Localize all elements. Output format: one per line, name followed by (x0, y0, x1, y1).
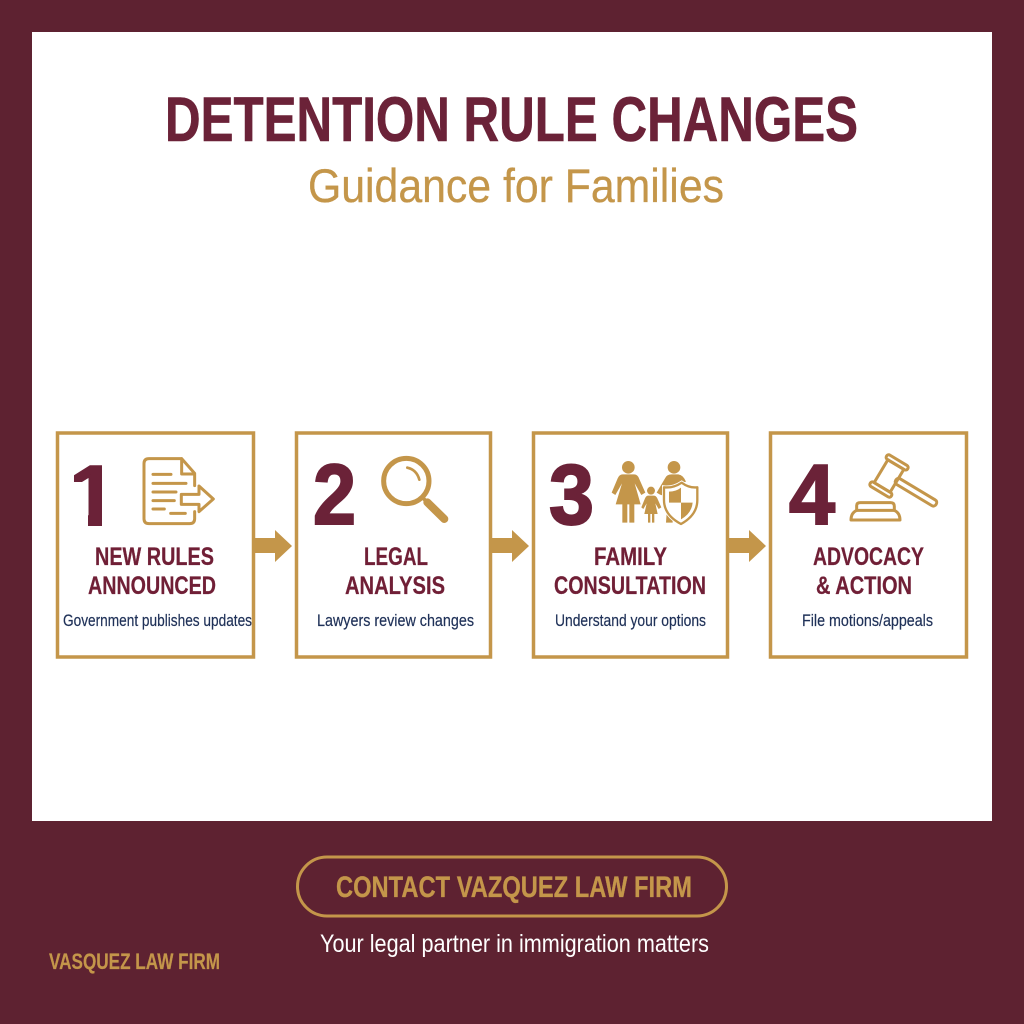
step 1 heading (88, 543, 216, 600)
call-to-action button (298, 857, 726, 916)
icon: document with arrow (144, 459, 213, 524)
step 2 heading: ANALYSIS (345, 572, 445, 600)
panel: white content area (32, 32, 992, 821)
panel: step 2 (296, 433, 490, 657)
icon: gavel (851, 454, 946, 520)
step 4 number: 4 (789, 448, 835, 543)
step 1 description: Government publishes updates (63, 611, 252, 630)
step 1 heading: NEW RULES (95, 543, 214, 571)
step 2 heading (345, 543, 445, 600)
step 3 number: 3 (549, 448, 594, 543)
subtitle: Guidance for Families (308, 159, 724, 212)
title: DETENTION RULE CHANGES (165, 85, 858, 155)
step 4 heading: & ACTION (816, 572, 912, 600)
icon: family with shield (612, 461, 697, 524)
step 2 description: Lawyers review changes (317, 611, 474, 630)
step 3 heading: FAMILY (594, 543, 667, 571)
call-to-action button: CONTACT VAZQUEZ LAW FIRM (336, 871, 692, 904)
panel: step 4 (770, 433, 966, 657)
step 4 description: File motions/appeals (802, 611, 933, 630)
arrow: step 3 to 4 (729, 530, 766, 562)
step 2 heading: LEGAL (364, 543, 428, 571)
step 3 heading: CONSULTATION (554, 572, 706, 600)
step 3 description: Understand your options (555, 611, 706, 630)
step 2 number: 2 (313, 448, 356, 543)
step 4 heading: ADVOCACY (813, 543, 924, 571)
step 1 heading: ANNOUNCED (88, 572, 216, 600)
tagline: Your legal partner in immigration matters (320, 930, 709, 958)
step 4 heading (813, 543, 924, 600)
arrow: step 1 to 2 (255, 530, 292, 562)
step 1 number: 1 (69, 449, 118, 544)
arrow: step 2 to 3 (492, 530, 529, 562)
firm name: VASQUEZ LAW FIRM (49, 949, 220, 974)
icon: magnifying glass (384, 458, 444, 519)
step 3 heading (554, 543, 706, 600)
panel: step 3 (534, 433, 728, 657)
panel: step 1 (58, 433, 254, 657)
